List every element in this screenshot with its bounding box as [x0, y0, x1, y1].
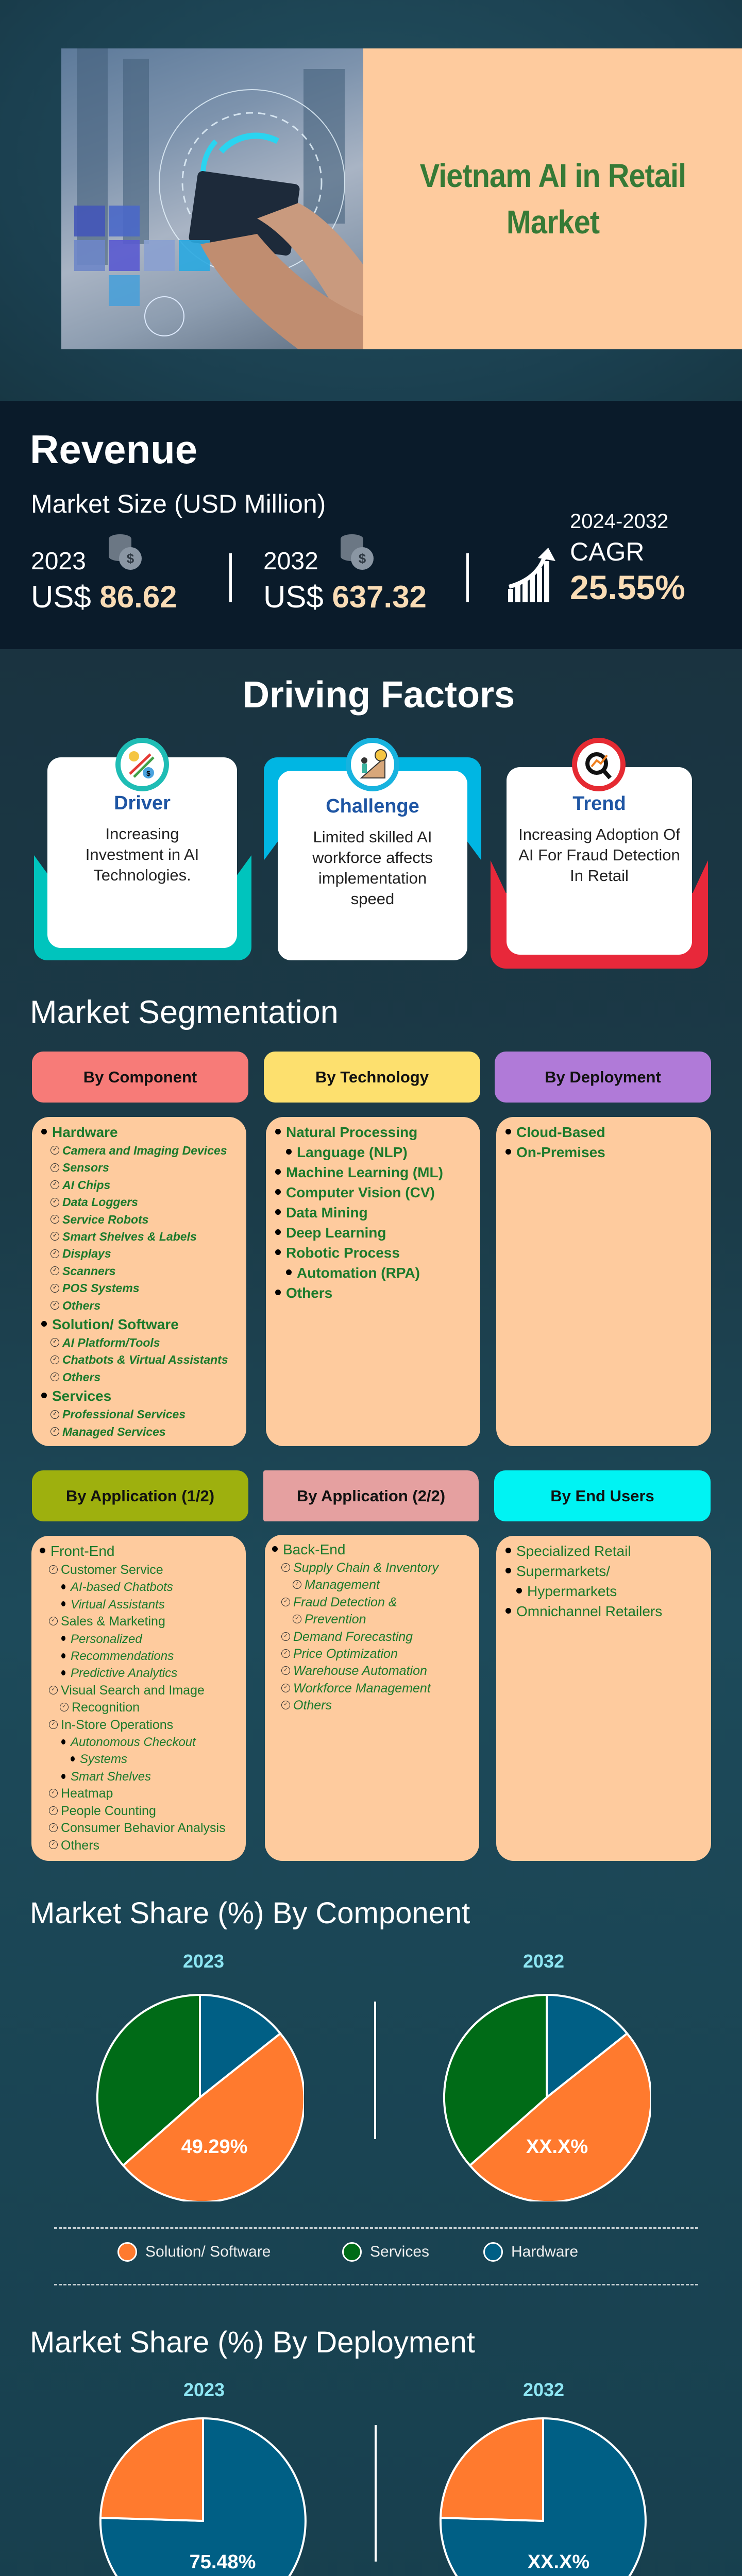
list: application 2: Others — [293, 1698, 332, 1713]
background: revenue band — [0, 401, 742, 649]
pie: deployment 2023: 75.48% — [190, 2551, 256, 2573]
revenue 2023: US$ 86.62 — [31, 580, 177, 614]
list: application 1: Visual Search and Image — [61, 1683, 205, 1698]
header: by technology: By Technology — [315, 1067, 429, 1086]
list: component: Displays — [62, 1247, 111, 1260]
hero photo — [61, 48, 363, 349]
title: Vietnam AI in Retail — [419, 157, 686, 194]
icon: driver — [115, 738, 169, 791]
panel: driver: Increasing Investment in AI Technologies. — [86, 825, 199, 884]
legend: component: Services — [370, 2243, 429, 2260]
list: application 1: Smart Shelves — [71, 1770, 151, 1784]
icon: driver: $ — [146, 769, 150, 777]
pie: component 2023: 49.29% — [181, 2136, 247, 2158]
list: application 1 — [31, 1536, 246, 1861]
list: application 2: Warehouse Automation — [293, 1664, 427, 1678]
panel: trend: Increasing Adoption Of AI For Fraud Detection In Retail — [518, 825, 680, 885]
panel: driver — [34, 738, 251, 960]
list: component: Others — [62, 1299, 100, 1312]
background: middle — [0, 649, 742, 2576]
label: 2032: 2032 — [523, 2379, 564, 2400]
icon: coins — [341, 534, 374, 570]
list: component: Chatbots & Virtual Assistants — [62, 1353, 228, 1366]
list: application 1: Heatmap — [61, 1786, 113, 1801]
icon: coins — [109, 534, 142, 570]
panel: challenge: Challenge — [326, 795, 419, 817]
list: application 1: Front-End — [50, 1543, 114, 1559]
pie: deployment 2032 — [439, 2417, 647, 2576]
heading: market share by deployment: Market Share (%) By Deployment — [30, 2326, 475, 2359]
list: application 1: AI-based Chatbots — [71, 1580, 173, 1594]
list: application 1: Others — [61, 1838, 99, 1853]
list: application 1: Personalized — [71, 1632, 142, 1646]
list: component — [32, 1117, 246, 1446]
header: by end users — [494, 1470, 711, 1521]
list: application 1: Predictive Analytics — [71, 1666, 177, 1680]
list: component: AI Platform/Tools — [62, 1336, 160, 1349]
list: application 1: Systems — [80, 1752, 127, 1766]
panel: challenge: Limited skilled AI workforce affects implementation speed — [312, 828, 433, 908]
list: technology: Deep Learning — [286, 1225, 386, 1241]
list: end users: Hypermarkets — [527, 1583, 617, 1599]
list: technology: Natural Processing — [286, 1124, 417, 1140]
list: component: Smart Shelves & Labels — [62, 1230, 197, 1243]
list: application 1: Customer Service — [61, 1563, 163, 1577]
revenue 2032: 2032 — [263, 548, 318, 575]
list: component: Managed Services — [62, 1425, 166, 1438]
list: application 1: Autonomous Checkout — [71, 1735, 196, 1749]
list: component: Camera and Imaging Devices — [62, 1144, 227, 1157]
CAGR block: CAGR — [570, 537, 644, 566]
pie: deployment 2032: XX.X% — [528, 2551, 589, 2573]
list: component: Service Robots — [62, 1213, 148, 1226]
pie: component 2032 — [443, 1994, 651, 2201]
header: by deployment — [495, 1052, 711, 1103]
list: application 2: Back-End — [283, 1541, 345, 1557]
legend: component: Solution/ Software — [145, 2243, 271, 2260]
CAGR block — [570, 510, 685, 606]
list: end users: Specialized Retail — [516, 1543, 631, 1559]
header: by deployment: By Deployment — [545, 1067, 661, 1086]
CAGR block: 2024-2032 — [570, 510, 668, 533]
CAGR block: 25.55% — [570, 568, 685, 606]
list: technology: Computer Vision (CV) — [286, 1184, 435, 1200]
panel: trend: Trend — [572, 793, 626, 815]
list: application 2: Fraud Detection & — [293, 1595, 397, 1609]
heading: driving factors: Driving Factors — [243, 674, 515, 716]
panel: trend — [491, 738, 708, 969]
list: application 2: Supply Chain & Inventory — [293, 1561, 439, 1575]
list: end users: Supermarkets/ — [516, 1563, 610, 1579]
list: deployment: Cloud-Based — [516, 1124, 605, 1140]
panel: challenge — [264, 738, 481, 960]
revenue 2023 — [31, 534, 177, 614]
header: by application 2 — [263, 1470, 479, 1521]
list: technology: Language (NLP) — [297, 1144, 408, 1160]
divider — [374, 2002, 376, 2139]
header: by application 1 — [32, 1470, 248, 1521]
list: component: POS Systems — [62, 1281, 140, 1295]
list: application 2: Workforce Management — [293, 1681, 431, 1696]
legend: component — [117, 2242, 578, 2262]
header: by technology — [264, 1052, 480, 1103]
icon: growth chart — [508, 548, 555, 602]
label: 2032: 2032 — [523, 1951, 564, 1972]
revenue 2032: US$ 637.32 — [263, 580, 427, 614]
divider — [466, 553, 469, 602]
background: top — [0, 0, 742, 401]
list: application 2 — [265, 1535, 479, 1861]
pie: deployment 2023 — [99, 2417, 307, 2576]
list: component: Scanners — [62, 1264, 116, 1278]
list: application 1: Virtual Assistants — [71, 1598, 165, 1612]
list: end users: Omnichannel Retailers — [516, 1603, 662, 1619]
title: Market — [506, 204, 599, 241]
label: 2023: 2023 — [183, 1951, 224, 1972]
header: by application 1: By Application (1/2) — [66, 1487, 214, 1504]
list: deployment — [496, 1117, 711, 1446]
icon: challenge — [346, 738, 399, 791]
list: component: Professional Services — [62, 1408, 185, 1421]
header: by component — [32, 1052, 248, 1103]
header: by application 2: By Application (2/2) — [297, 1487, 445, 1504]
title — [419, 157, 686, 241]
pie: component 2023 — [96, 1994, 304, 2201]
list: technology: Automation (RPA) — [297, 1265, 420, 1281]
list: component: Sensors — [62, 1161, 109, 1174]
list: technology: Others — [286, 1285, 332, 1301]
list: application 2: Management — [305, 1578, 380, 1592]
list: application 1: People Counting — [61, 1804, 156, 1818]
legend: component: Hardware — [511, 2243, 578, 2260]
market size subtitle: Market Size (USD Million) — [31, 489, 326, 518]
list: application 2: Demand Forecasting — [293, 1630, 413, 1644]
list: technology: Robotic Process — [286, 1245, 400, 1261]
icon: trend — [572, 738, 626, 791]
revenue 2023: 2023 — [31, 548, 86, 575]
list: end users — [496, 1536, 711, 1861]
heading: market share by component: Market Share (%) By Component — [30, 1896, 470, 1930]
list: application 1: Recommendations — [71, 1649, 174, 1663]
list: application 1: In-Store Operations — [61, 1718, 173, 1732]
panel: driver: Driver — [114, 792, 171, 814]
list: component: Others — [62, 1370, 100, 1384]
list: technology — [266, 1117, 480, 1446]
pie: component 2032: XX.X% — [526, 2136, 588, 2158]
list: application 1: Sales & Marketing — [61, 1614, 165, 1629]
header: by component: By Component — [83, 1067, 197, 1086]
list: application 1: Consumer Behavior Analysis — [61, 1821, 226, 1835]
list: component: Data Loggers — [62, 1195, 138, 1209]
label: 2023: 2023 — [183, 2379, 225, 2400]
list: technology: Data Mining — [286, 1205, 368, 1221]
header: by end users: By End Users — [550, 1487, 654, 1504]
heading: market segmentation: Market Segmentation — [30, 994, 339, 1030]
list: application 2: Price Optimization — [293, 1647, 398, 1661]
list: application 2: Prevention — [305, 1612, 366, 1626]
divider — [229, 553, 232, 602]
list: application 1: Recognition — [72, 1700, 140, 1715]
revenue heading: Revenue — [30, 427, 197, 472]
list: component: Services — [52, 1388, 111, 1404]
list: deployment: On-Premises — [516, 1144, 605, 1160]
title panel — [363, 48, 742, 349]
revenue 2032 — [263, 534, 427, 614]
divider — [375, 2425, 377, 2562]
list: technology: Machine Learning (ML) — [286, 1164, 443, 1180]
list: component: Hardware — [52, 1124, 118, 1140]
list: component: AI Chips — [62, 1178, 110, 1192]
icon: coins: $ — [359, 551, 366, 566]
list: component: Solution/ Software — [52, 1316, 179, 1332]
icon: coins: $ — [127, 551, 134, 566]
